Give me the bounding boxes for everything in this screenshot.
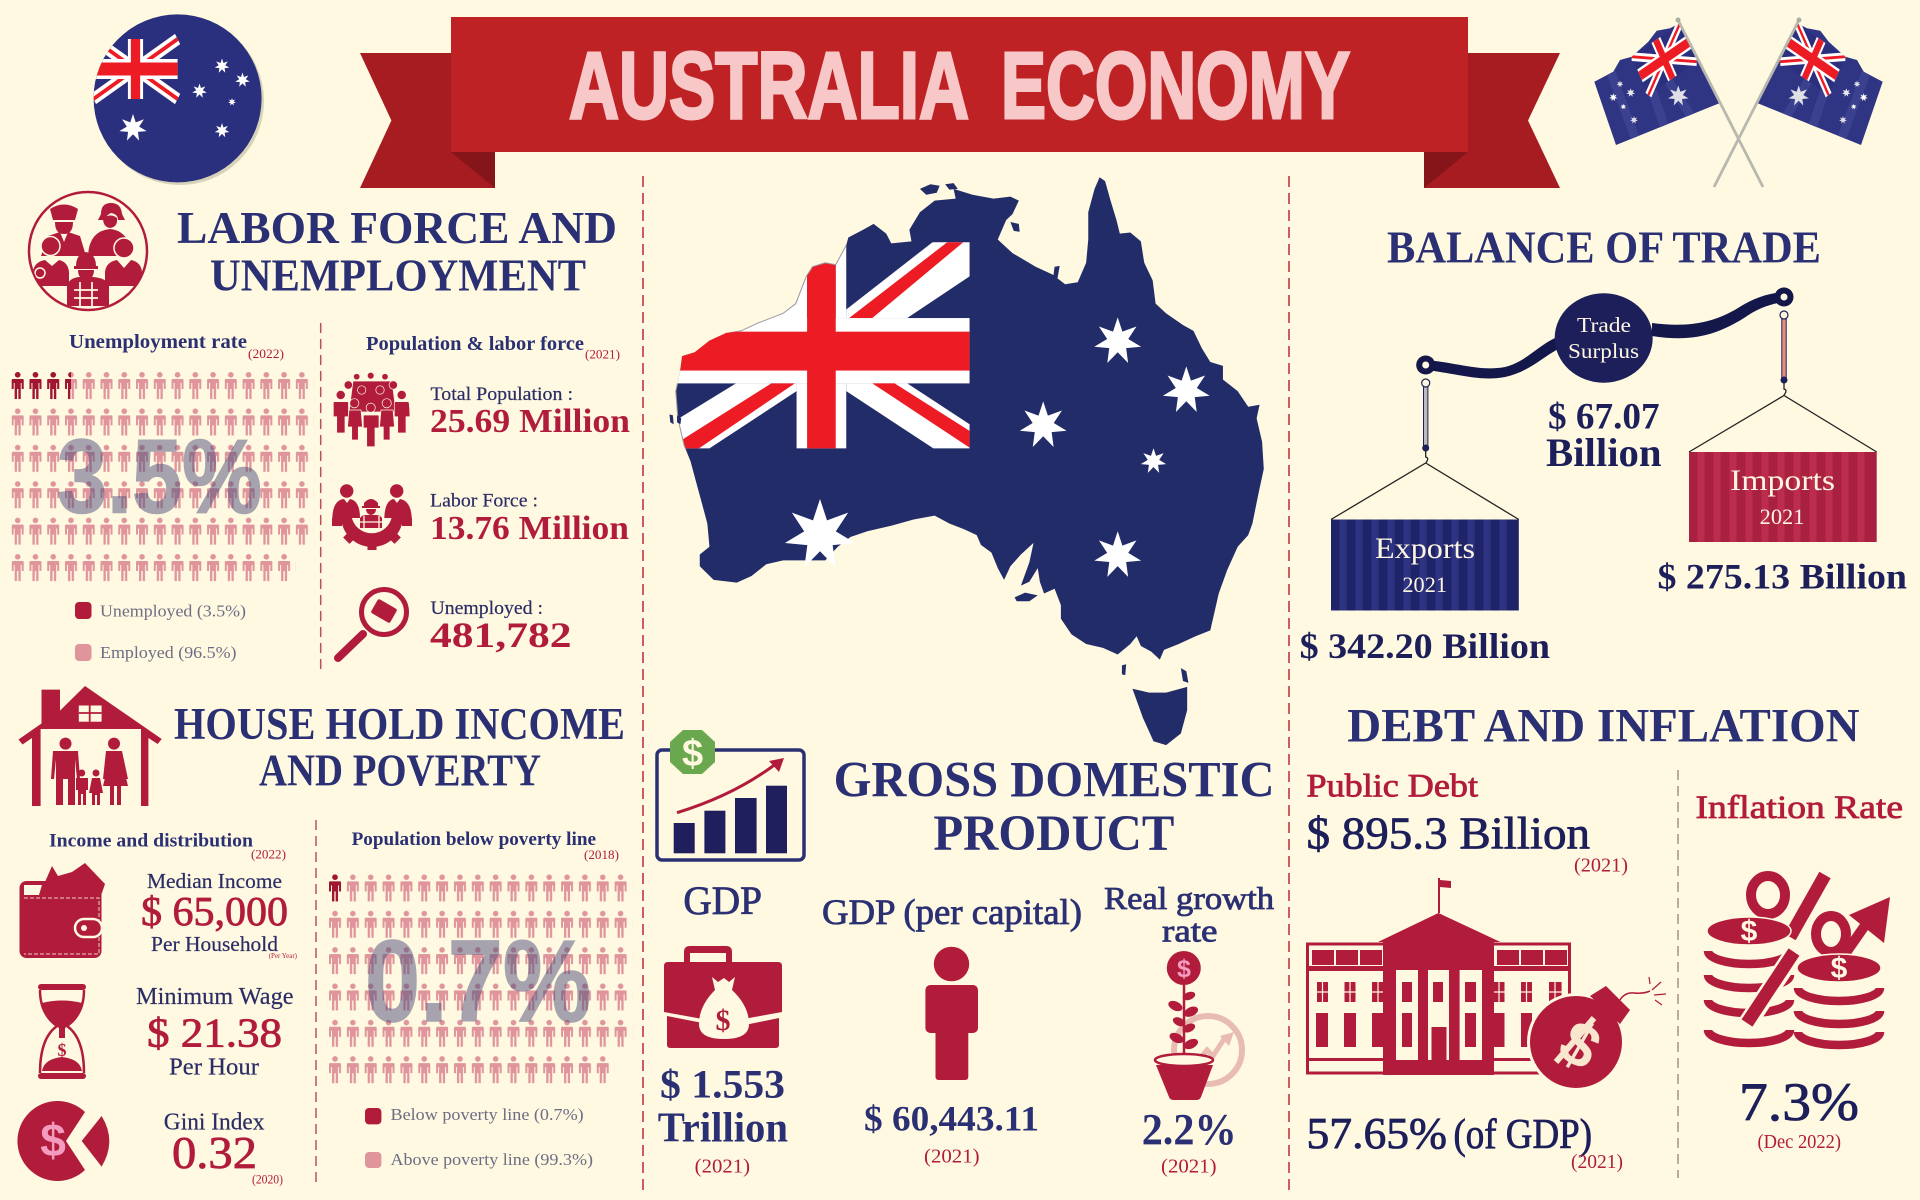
- text: median income: Per Household: [151, 932, 278, 956]
- text: median income: (Per Year): [269, 952, 298, 960]
- text: labor force: 13.76 Million: [430, 510, 629, 547]
- container: exports: Exports: [1375, 532, 1475, 565]
- icon: hourglass: [38, 984, 86, 1079]
- date: (Dec 2022): [1758, 1131, 1841, 1153]
- value: debt share of GDP: (2021): [1571, 1151, 1623, 1173]
- subheading: population below poverty line: Population below poverty line: [352, 829, 596, 850]
- value: trade surplus: Billion: [1546, 430, 1662, 475]
- container: imports: [1689, 311, 1877, 542]
- value: real growth rate: [1142, 1105, 1237, 1178]
- text: total population: Total Population :: [430, 384, 573, 405]
- icon: gini pie: $: [40, 1114, 66, 1166]
- text: minimum wage: Minimum Wage: [136, 984, 294, 1010]
- map: Australia with flag: [669, 177, 1264, 745]
- icon: house with family: [18, 686, 162, 806]
- text: unemployed: Unemployed :: [430, 598, 543, 619]
- year: (2022): [251, 846, 286, 862]
- icon: person: [925, 947, 978, 1080]
- heading: DEBT AND INFLATION: [1347, 700, 1860, 753]
- text: median income: $ 65,000: [141, 888, 288, 934]
- heading: BALANCE OF TRADE: [1387, 221, 1821, 272]
- value: imports: $ 275.13 Billion: [1658, 556, 1907, 596]
- icon: crossed flags: [1594, 18, 1883, 187]
- container: exports: 2021: [1402, 572, 1447, 597]
- text: gini index: 0.32: [172, 1127, 257, 1178]
- value: GDP: $ 1.553: [660, 1062, 785, 1107]
- beam end rings: [1416, 288, 1794, 374]
- text: minimum wage: [136, 984, 294, 1081]
- value: real growth rate: 2.2%: [1142, 1105, 1237, 1154]
- year: (2018): [584, 847, 619, 862]
- text: gini index: Gini Index: [164, 1110, 264, 1136]
- icon: round Australian flag: [93, 14, 264, 185]
- legend: below poverty line: Below poverty line (0.7%): [390, 1105, 584, 1124]
- icon: GDP chart: $: [682, 733, 703, 775]
- value: inflation: 7.3%: [1739, 1072, 1859, 1132]
- badge: trade surplus: [1555, 293, 1653, 383]
- icon: bomb: [1528, 977, 1666, 1090]
- text: unemployed: [430, 598, 572, 655]
- label: real growth rate: Real growth: [1104, 880, 1274, 916]
- value: GDP: (2021): [695, 1156, 750, 1178]
- badge: trade surplus: Trade: [1577, 313, 1631, 337]
- beam right: [1652, 292, 1784, 338]
- value: GDP: Trillion: [658, 1106, 788, 1152]
- icon: crowd: [333, 372, 410, 447]
- value: public debt: $ 895.3 Billion: [1306, 808, 1590, 858]
- icon: government building: [1307, 878, 1570, 1075]
- legend: above poverty line: Above poverty line (99.3%): [390, 1150, 593, 1169]
- title: AUSTRALIA: [569, 33, 969, 139]
- text: unemployed: 481,782: [430, 615, 572, 655]
- text: total population: [430, 384, 630, 440]
- text: total population: 25.69 Million: [430, 403, 630, 440]
- panel: household income and poverty: [17, 686, 632, 1186]
- icon: wallet: [20, 863, 105, 958]
- heading: GROSS DOMESTIC: [834, 753, 1275, 809]
- icon: workers circle: [29, 192, 147, 310]
- icon: money plant: [1155, 951, 1242, 1100]
- icon: gini pie: [17, 1101, 109, 1181]
- value: GDP: [658, 1062, 788, 1178]
- panel: balance of trade: [1300, 221, 1907, 666]
- text: labor force: Labor Force :: [430, 490, 538, 512]
- heading: UNEMPLOYMENT: [210, 250, 586, 300]
- panel: labor force and unemployment: [12, 192, 630, 662]
- value: GDP per capita: $ 60,443.11: [864, 1099, 1039, 1139]
- text: minimum wage: $ 21.38: [147, 1010, 282, 1056]
- heading: PRODUCT: [933, 806, 1174, 862]
- icon: magnifier: [338, 590, 406, 658]
- title ribbon: [360, 17, 1560, 188]
- subheading: unemployment rate: Unemployment rate: [69, 331, 247, 353]
- text: median income: Median Income: [147, 869, 282, 893]
- value: debt share of GDP: 57.65%: [1306, 1109, 1447, 1158]
- beam left: [1425, 338, 1558, 378]
- chart: poverty people grid: [329, 874, 632, 1084]
- heading: HOUSE HOLD INCOME: [174, 699, 625, 749]
- container: imports: 2021: [1760, 504, 1804, 529]
- container: imports: Imports: [1730, 464, 1835, 497]
- text: gini index: (2020): [252, 1172, 283, 1186]
- icon: GDP chart: [657, 730, 804, 860]
- year: (2021): [1574, 855, 1628, 877]
- heading: AND POVERTY: [259, 746, 541, 796]
- icon: percent coins: $: [1741, 915, 1758, 948]
- icon: gear workers: [332, 484, 412, 550]
- legend: unemployed: Unemployed (3.5%): [100, 602, 246, 621]
- value: trade surplus: $ 67.07: [1548, 396, 1660, 437]
- big value: 3.5%: [57, 419, 262, 536]
- icon: briefcase: $: [716, 1004, 730, 1037]
- label: real growth rate: rate: [1162, 913, 1218, 949]
- icon: briefcase: [664, 946, 782, 1048]
- icon: hourglass: $: [58, 1040, 66, 1060]
- value: debt share of GDP: [1306, 1109, 1623, 1173]
- icon: money plant: $: [1177, 955, 1191, 983]
- year: (2021): [585, 347, 620, 362]
- big value: 0.7%: [365, 916, 591, 1046]
- text: gini index: [164, 1110, 283, 1186]
- chart: unemployment people grid: [12, 372, 314, 582]
- panel: gross domestic product: [657, 730, 1275, 1178]
- icon: percent coins: [1707, 875, 1890, 1045]
- heading: LABOR FORCE AND: [177, 202, 617, 253]
- icon: percent coins: $: [1831, 952, 1848, 985]
- value: real growth rate: (2021): [1161, 1156, 1217, 1178]
- value: trade surplus: [1546, 396, 1662, 475]
- badge: trade surplus: Surplus: [1568, 339, 1639, 363]
- year: (2022): [248, 346, 284, 361]
- label: inflation rate: Inflation Rate: [1696, 790, 1903, 826]
- icon: bomb: $: [1548, 1007, 1612, 1084]
- value: GDP per capita: [864, 1099, 1039, 1168]
- text: median income: [141, 869, 298, 960]
- text: minimum wage: Per Hour: [169, 1055, 259, 1081]
- subheading: income and distribution: Income and distribution: [49, 830, 253, 851]
- panel: debt and inflation: [1306, 700, 1903, 1173]
- value: GDP per capita: (2021): [924, 1146, 980, 1168]
- label: public debt: Public Debt: [1306, 769, 1478, 805]
- title: ECONOMY: [1001, 33, 1350, 139]
- container: exports: [1331, 379, 1519, 610]
- value: debt share of GDP: (of GDP): [1454, 1112, 1592, 1158]
- value: exports: $ 342.20 Billion: [1300, 626, 1550, 666]
- text: labor force: [430, 490, 629, 547]
- label: GDP per capita: GDP (per capital): [822, 892, 1082, 932]
- legend: employed: Employed (96.5%): [100, 643, 236, 662]
- label: GDP: GDP: [683, 878, 762, 923]
- subheading: population and labor force: Population & labor force: [366, 333, 584, 355]
